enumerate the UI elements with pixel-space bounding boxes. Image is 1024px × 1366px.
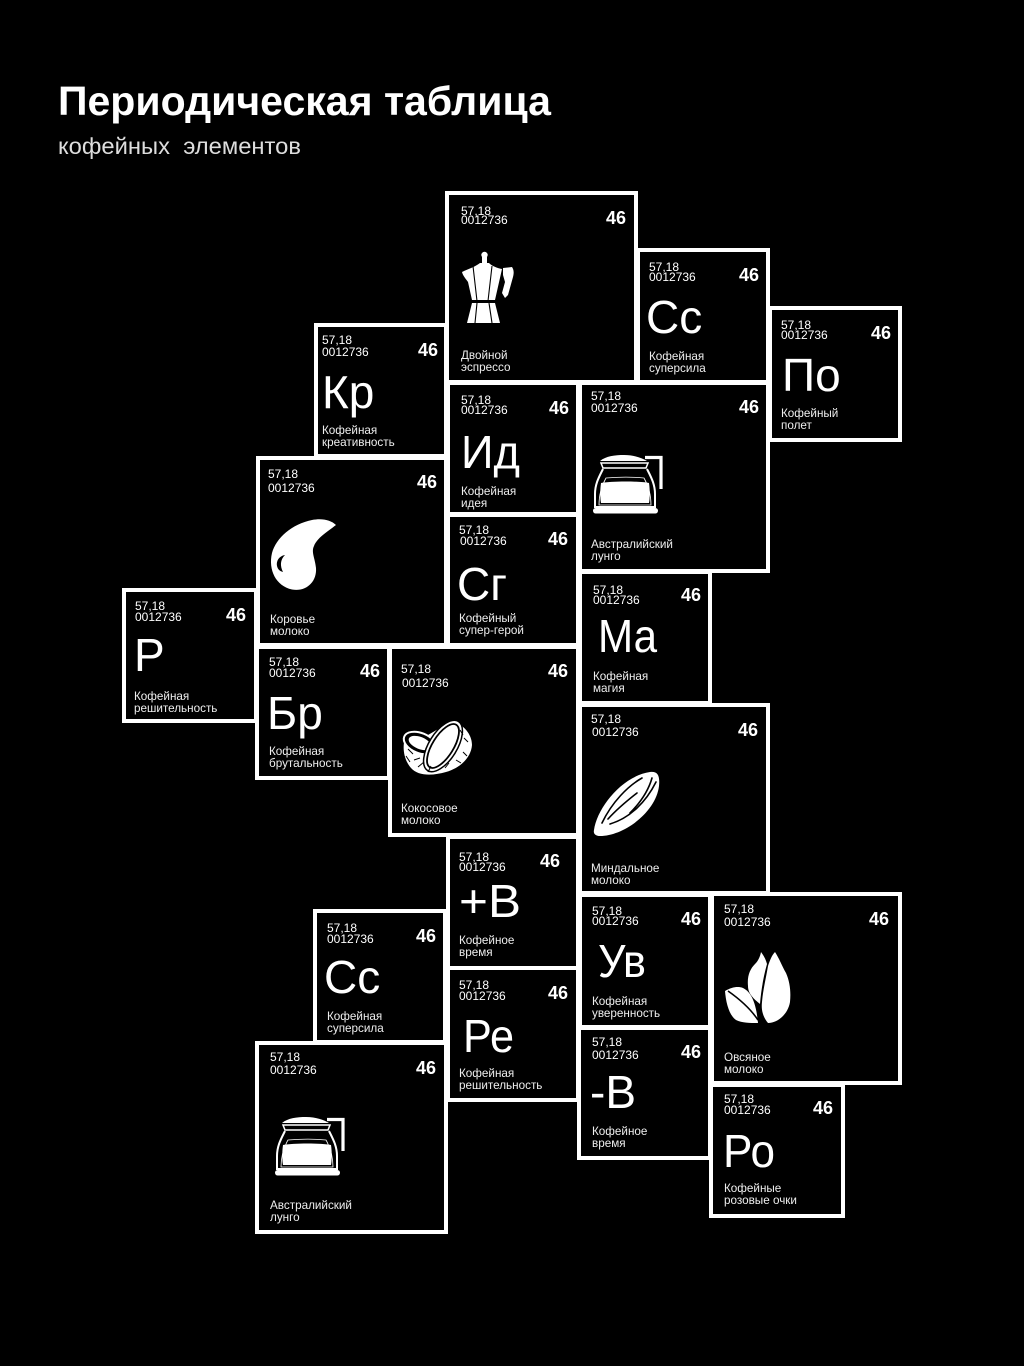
panel: flight <box>770 308 900 440</box>
panel: australian lungo 2: 46 <box>416 1058 436 1078</box>
panel: brutality <box>257 647 389 778</box>
panel: super hero <box>448 515 578 645</box>
panel: determination 2: 46 <box>548 983 568 1003</box>
panel: double espresso: 0012736 <box>461 213 508 227</box>
panel: almond milk: 0012736 <box>592 725 639 739</box>
panel: coconut milk: 46 <box>548 661 568 681</box>
panel: rose glasses: 46 <box>813 1098 833 1118</box>
panel: brutality: 57,18 <box>269 655 299 669</box>
panel: creativity <box>316 325 446 456</box>
panel: Cc super strength: суперсила <box>649 362 706 375</box>
panel: Cc super strength 2: 46 <box>416 926 436 946</box>
panel: rose glasses: Кофейные <box>724 1182 781 1195</box>
panel: determination: 57,18 <box>135 599 165 613</box>
panel: confidence: Кофейная <box>592 995 647 1008</box>
panel: plus time: 0012736 <box>459 860 506 874</box>
panel: oat milk: 57,18 <box>724 902 754 916</box>
panel: confidence <box>580 895 710 1027</box>
panel: flight: 57,18 <box>781 318 811 332</box>
panel: cow milk: Коровье <box>270 613 315 626</box>
panel: Cc super strength 2: Сс <box>324 951 380 1003</box>
panel: coconut milk: 57,18 <box>401 662 431 676</box>
panel: determination 2: Кофейная <box>459 1067 514 1080</box>
panel: brutality: Бр <box>267 687 323 739</box>
panel: plus time: Кофейное <box>459 934 514 947</box>
panel: Cc super strength 2: 57,18 <box>327 921 357 935</box>
panel: magic: 0012736 <box>593 593 640 607</box>
panel: oat milk: 0012736 <box>724 915 771 929</box>
panel: cow milk <box>258 458 446 645</box>
panel: rose glasses: 57,18 <box>724 1092 754 1106</box>
panel: double espresso: эспрессо <box>461 361 511 374</box>
panel: magic: Ма <box>598 610 657 662</box>
panel: confidence: 46 <box>681 909 701 929</box>
panel: coconut milk <box>390 647 578 835</box>
panel: minus time: время <box>592 1137 626 1150</box>
panel: super hero: Сг <box>457 558 507 610</box>
panel: coconut milk: молоко <box>401 814 441 827</box>
panel: idea <box>448 383 578 514</box>
icon: oat grains <box>725 952 790 1023</box>
subtitle: кофейных элементов <box>58 133 301 159</box>
panel: creativity: Кр <box>322 366 374 418</box>
panel: brutality: брутальность <box>269 757 343 770</box>
panel: determination: решительность <box>134 702 217 715</box>
panel: minus time: 0012736 <box>592 1048 639 1062</box>
panel: idea: 46 <box>549 398 569 418</box>
panel: australian lungo 2: 57,18 <box>270 1050 300 1064</box>
panel: super hero: 57,18 <box>459 523 489 537</box>
panel: minus time <box>579 1028 710 1158</box>
panel: oat milk <box>712 894 900 1083</box>
panel: creativity: 0012736 <box>322 345 369 359</box>
panel: almond milk: Миндальное <box>591 862 659 875</box>
panel: rose glasses <box>711 1085 843 1216</box>
panel: super hero: 0012736 <box>460 534 507 548</box>
panel: minus time: 46 <box>681 1042 701 1062</box>
panel: plus time: время <box>459 946 493 959</box>
panel: oat milk: Овсяное <box>724 1051 771 1064</box>
panel: minus time: 57,18 <box>592 1035 622 1049</box>
panel: australian lungo 2: Австралийский <box>270 1199 352 1212</box>
panel: creativity: креативность <box>322 436 395 449</box>
panel: creativity: Кофейная <box>322 424 377 437</box>
panel: determination 2: 0012736 <box>459 989 506 1003</box>
panel: super hero: Кофейный <box>459 612 516 625</box>
panel: coconut milk: 0012736 <box>402 676 449 690</box>
panel: flight: Кофейный <box>781 407 838 420</box>
panel: confidence: 0012736 <box>592 914 639 928</box>
panel: australian lungo <box>580 383 768 571</box>
panel: almond milk: 57,18 <box>591 712 621 726</box>
panel: australian lungo: 57,18 <box>591 389 621 403</box>
panel: australian lungo 2: лунго <box>270 1211 300 1224</box>
panel: Cc super strength 2: суперсила <box>327 1022 384 1035</box>
panel: creativity: 46 <box>418 340 438 360</box>
panel: brutality: 46 <box>360 661 380 681</box>
panel: idea: Кофейная <box>461 485 516 498</box>
panel: plus time <box>448 837 578 968</box>
panel: Cc super strength: 46 <box>739 265 759 285</box>
panel: plus time: 57,18 <box>459 850 489 864</box>
panel: brutality: Кофейная <box>269 745 324 758</box>
panel: cow milk: молоко <box>270 625 310 638</box>
title: Периодическая таблица <box>58 78 551 124</box>
panel: Cc super strength: 0012736 <box>649 270 696 284</box>
panel: Cc super strength: Кофейная <box>649 350 704 363</box>
panel: flight: полет <box>781 419 813 432</box>
panel: Cc super strength: 57,18 <box>649 260 679 274</box>
panel: plus time: +В <box>459 875 521 927</box>
panel: australian lungo: Австралийский <box>591 538 673 551</box>
panel: australian lungo 2: 0012736 <box>270 1063 317 1077</box>
panel: confidence: Ув <box>598 935 646 987</box>
panel: Cc super strength 2 <box>315 911 445 1042</box>
panel: oat milk: молоко <box>724 1063 764 1076</box>
panel: flight: По <box>782 349 841 401</box>
panel: super hero: супер-герой <box>459 624 524 637</box>
icon: coconut <box>400 714 472 778</box>
panel: australian lungo: лунго <box>591 550 621 563</box>
panel: rose glasses: 0012736 <box>724 1103 771 1117</box>
panel: minus time: -В <box>590 1066 636 1118</box>
panel: australian lungo 2 <box>257 1043 446 1232</box>
panel: magic: магия <box>593 682 625 695</box>
panel: idea: Ид <box>461 426 520 478</box>
panel: cow milk: 0012736 <box>268 481 315 495</box>
panel: creativity: 57,18 <box>322 333 352 347</box>
panel: idea: идея <box>461 497 487 510</box>
panel: magic: 46 <box>681 585 701 605</box>
panel: double espresso: Двойной <box>461 349 508 362</box>
panel: Cc super strength 2: Кофейная <box>327 1010 382 1023</box>
panel: double espresso: 57,18 <box>461 204 491 218</box>
panel: rose glasses: Ро <box>723 1125 775 1177</box>
panel: Cc super strength 2: 0012736 <box>327 932 374 946</box>
panel: australian lungo: 46 <box>739 397 759 417</box>
panel: idea: 0012736 <box>461 403 508 417</box>
panel: super hero: 46 <box>548 529 568 549</box>
panel: double espresso: 46 <box>606 208 626 228</box>
panel: confidence: уверенность <box>592 1007 660 1020</box>
icon: milk drop <box>271 519 336 590</box>
panel: coconut milk: Кокосовое <box>401 802 458 815</box>
panel: determination: Кофейная <box>134 690 189 703</box>
panel: almond milk: 46 <box>738 720 758 740</box>
icon: coffee carafe 2 <box>275 1117 343 1176</box>
panel: determination: 46 <box>226 605 246 625</box>
icon: coffee carafe <box>593 455 661 514</box>
panel: cow milk: 57,18 <box>268 467 298 481</box>
panel: cow milk: 46 <box>417 472 437 492</box>
panel: flight: 0012736 <box>781 328 828 342</box>
panel: flight: 46 <box>871 323 891 343</box>
panel: magic: Кофейная <box>593 670 648 683</box>
panel: rose glasses: розовые очки <box>724 1194 797 1207</box>
panel: determination <box>124 590 256 721</box>
panel: australian lungo: 0012736 <box>591 401 638 415</box>
panel: determination 2 <box>448 968 578 1100</box>
panel: determination 2: 57,18 <box>459 978 489 992</box>
panel: minus time: Кофейное <box>592 1125 647 1138</box>
icon: moka pot <box>462 252 514 323</box>
panel: confidence: 57,18 <box>592 904 622 918</box>
panel: brutality: 0012736 <box>269 666 316 680</box>
panel: almond milk <box>580 705 768 893</box>
panel: plus time: 46 <box>540 851 560 871</box>
panel: double espresso <box>447 193 636 382</box>
panel: magic <box>580 572 710 703</box>
panel: determination 2: решительность <box>459 1079 542 1092</box>
panel: almond milk: молоко <box>591 874 631 887</box>
panel: determination: 0012736 <box>135 610 182 624</box>
panel: Cc super strength: Сс <box>646 291 702 343</box>
panel: magic: 57,18 <box>593 583 623 597</box>
panel: idea: 57,18 <box>461 393 491 407</box>
panel: oat milk: 46 <box>869 909 889 929</box>
icon: almond <box>594 772 659 836</box>
panel: determination 2: Ре <box>463 1010 514 1062</box>
panel: determination: Р <box>134 629 165 681</box>
panel: Cc super strength <box>638 250 768 382</box>
